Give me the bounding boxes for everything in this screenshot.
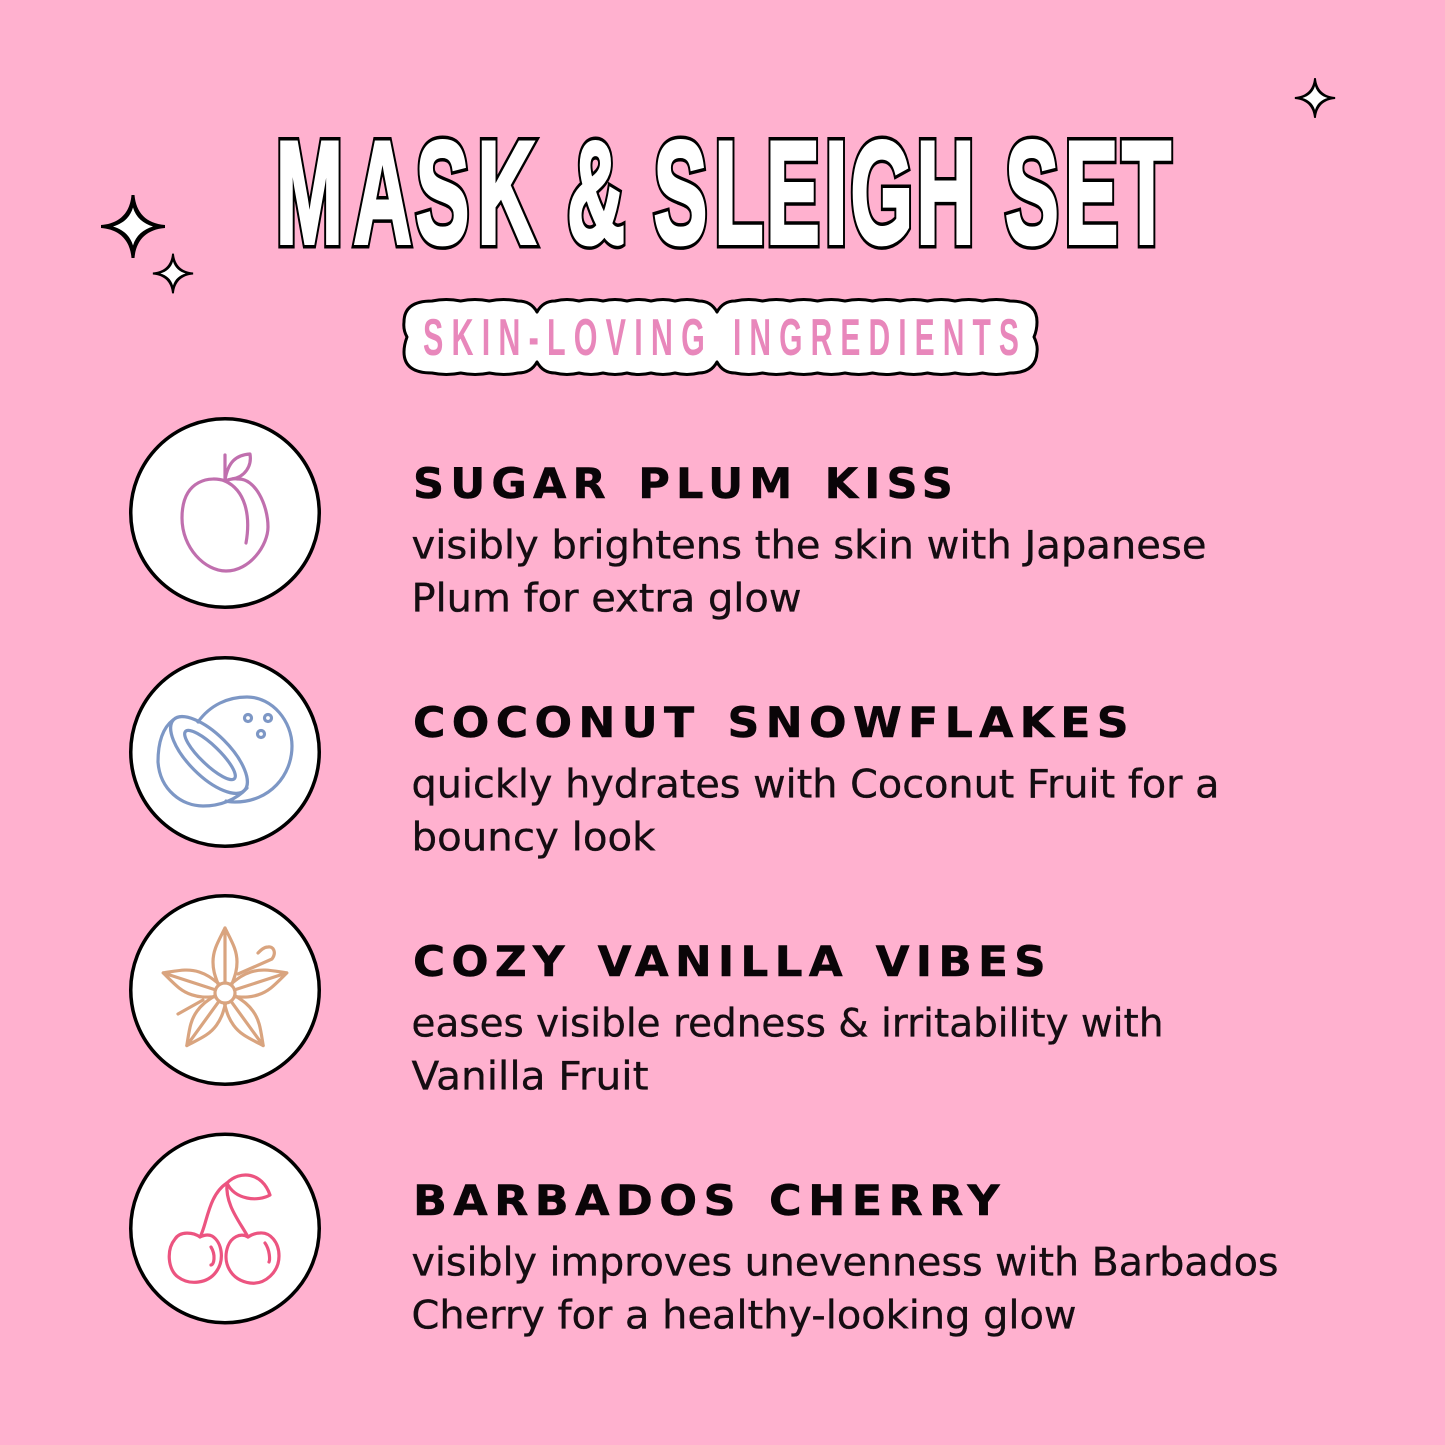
description: bouncy look — [412, 816, 656, 860]
description: eases visible redness & irritability with — [412, 1002, 1164, 1046]
icon: top right sparkle — [1295, 78, 1335, 118]
icon: coconut — [131, 658, 319, 846]
icon: plum — [131, 419, 319, 607]
ingredient: sugar plum kiss — [131, 419, 1206, 622]
heading: COCONUT SNOWFLAKES — [413, 698, 1135, 747]
heading: COZY VANILLA VIBES — [413, 937, 1052, 986]
heading: SUGAR PLUM KISS — [413, 459, 959, 508]
heading: BARBADOS CHERRY — [413, 1176, 1006, 1225]
subtitle badge: SKIN-LOVING — [423, 309, 713, 367]
title — [276, 110, 1171, 274]
title: MASK — [276, 110, 536, 274]
description: Vanilla Fruit — [412, 1054, 648, 1100]
title: MASK — [276, 110, 536, 274]
description: Plum for extra glow — [412, 576, 802, 622]
ingredient: coconut snowflakes — [131, 658, 1220, 860]
description — [412, 1240, 1278, 1338]
description: quickly hydrates with Coconut Fruit for a — [412, 762, 1220, 808]
ingredient: cozy vanilla vibes — [131, 896, 1164, 1100]
title: SET — [1005, 110, 1171, 274]
description — [412, 762, 1220, 860]
ingredient: barbados cherry — [131, 1134, 1278, 1338]
subtitle badge: INGREDIENTS — [733, 309, 1027, 367]
title: SET — [1005, 110, 1171, 274]
description: Cherry for a healthy-looking glow — [412, 1294, 1076, 1338]
icon: small sparkle — [153, 254, 193, 293]
title: & — [567, 110, 625, 274]
title: SLEIGH — [654, 110, 975, 274]
subtitle badge — [404, 300, 1037, 374]
title: SLEIGH — [654, 110, 975, 274]
icon: cherries — [131, 1134, 319, 1323]
description — [412, 524, 1206, 622]
description: visibly improves unevenness with Barbados — [412, 1240, 1278, 1286]
description: visibly brightens the skin with Japanese — [412, 524, 1206, 568]
description — [412, 1002, 1164, 1100]
icon: vanilla flower — [131, 896, 319, 1084]
icon: large sparkle — [101, 195, 165, 258]
title: & — [567, 110, 625, 274]
